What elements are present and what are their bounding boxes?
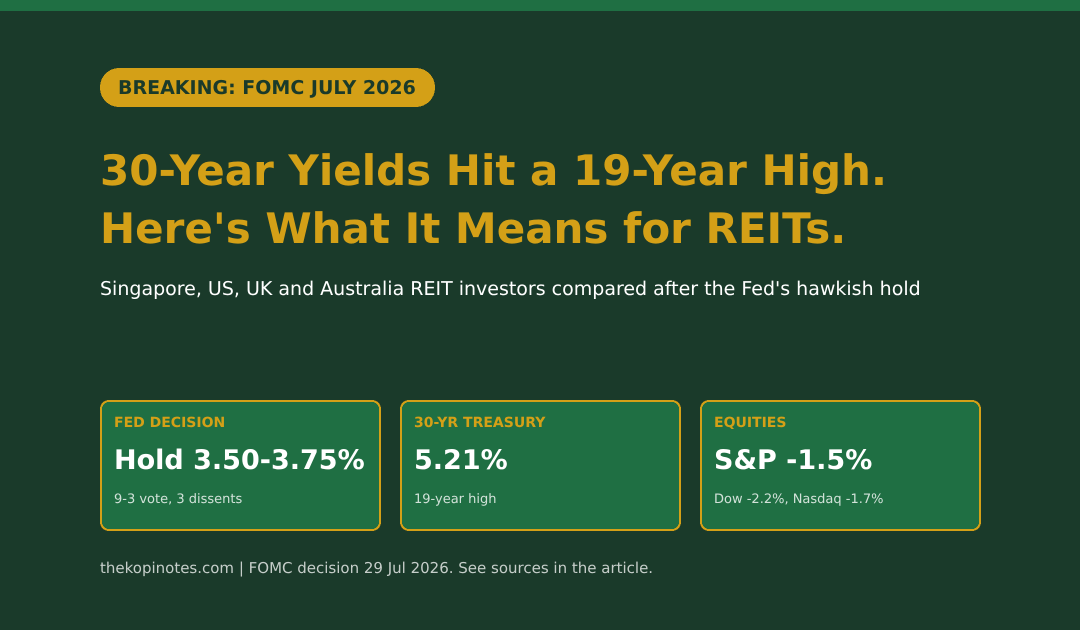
panel: Fed decision <box>101 401 380 530</box>
panel: 30-year Treasury: 30-YR TREASURY <box>414 415 546 431</box>
title: 30-Year Yields Hit a 19-Year High. <box>100 146 887 195</box>
panel: equities: Dow -2.2%, Nasdaq -1.7% <box>714 492 884 507</box>
title: Here's What It Means for REITs. <box>100 204 846 253</box>
panel: 30-year Treasury: 5.21% <box>414 445 508 476</box>
panel: equities: S&P -1.5% <box>714 445 872 476</box>
badge: breaking news: BREAKING: FOMC JULY 2026 <box>118 77 416 99</box>
title <box>100 146 887 253</box>
footer source line: thekopinotes.com | FOMC decision 29 Jul 2026. See sources in the article. <box>100 559 653 577</box>
top accent bar <box>0 0 1080 11</box>
subtitle: Singapore, US, UK and Australia REIT investors compared after the Fed's hawkish hold <box>100 278 921 300</box>
panel: 30-year Treasury: 19-year high <box>414 492 496 507</box>
panel: Fed decision: 9-3 vote, 3 dissents <box>114 492 243 507</box>
panel: equities <box>701 401 980 530</box>
panel: Fed decision: Hold 3.50-3.75% <box>114 445 365 476</box>
panel: 30-year Treasury <box>401 401 680 530</box>
panel: equities: EQUITIES <box>714 415 786 431</box>
badge: breaking news <box>100 68 435 107</box>
panel: Fed decision: FED DECISION <box>114 415 225 431</box>
